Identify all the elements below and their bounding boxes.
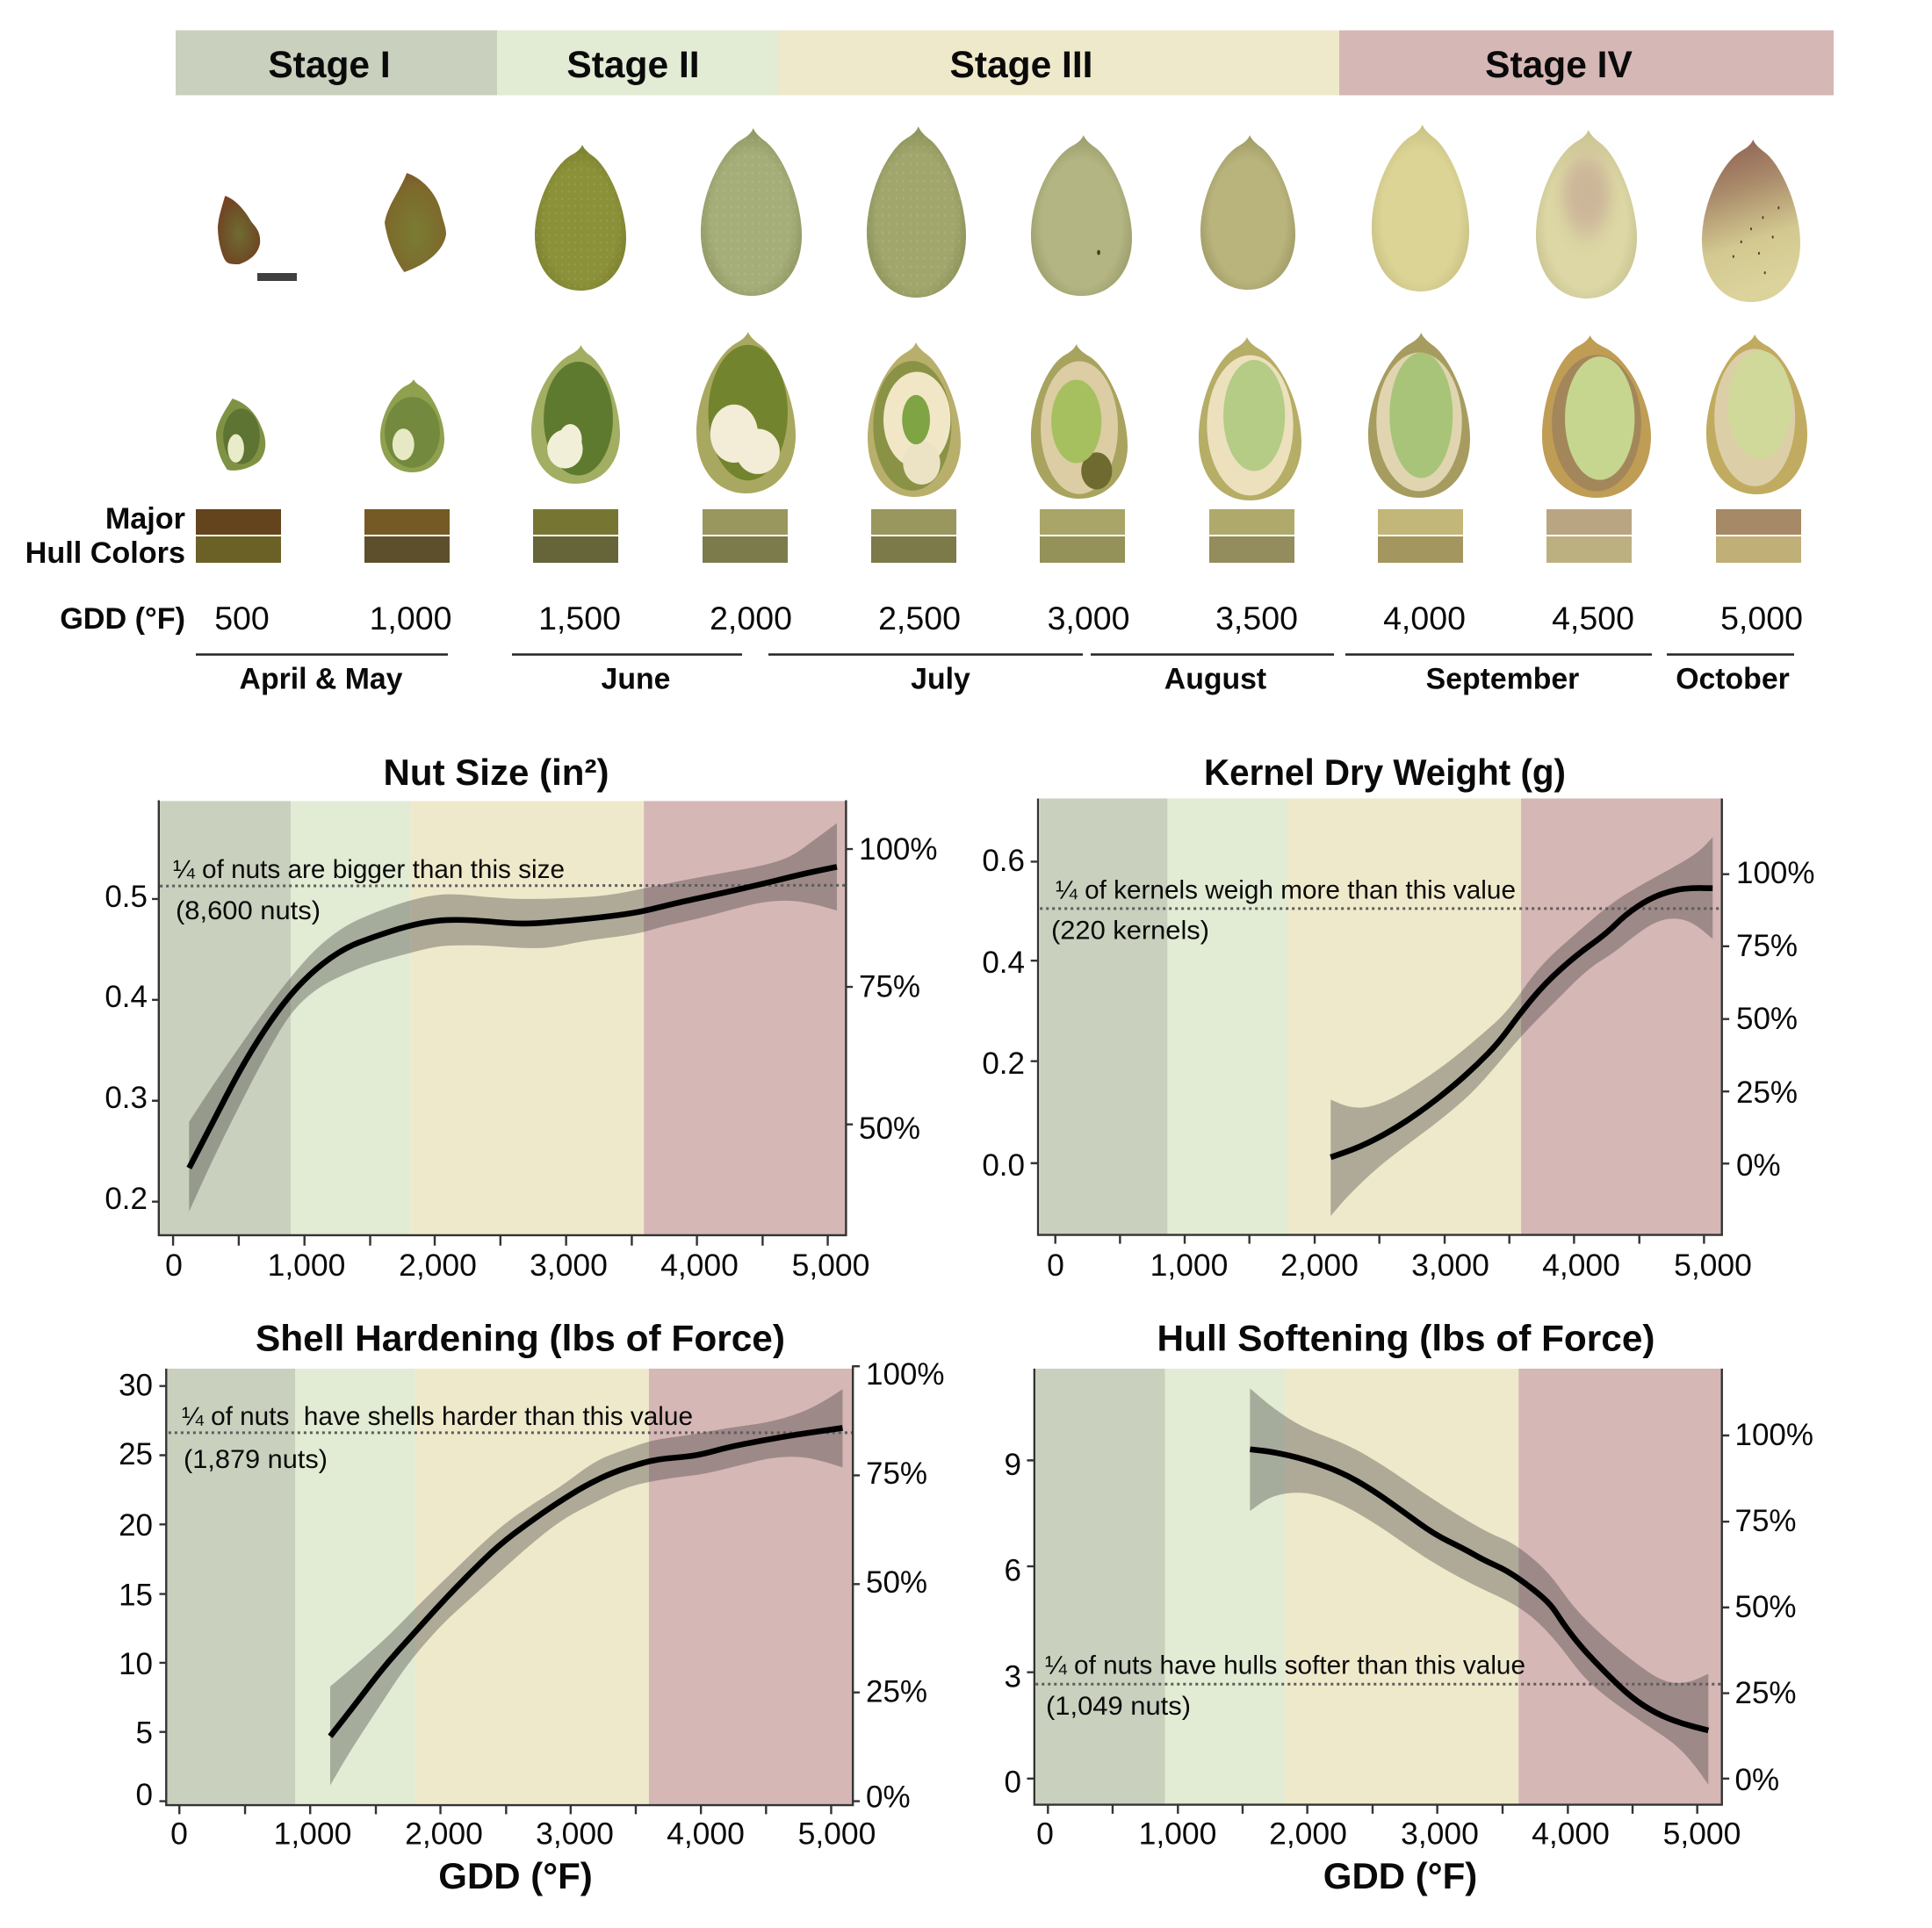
bottom axis labels: 4,000 (667, 1816, 745, 1851)
right axis percent labels: 50% (859, 1111, 920, 1146)
annotation: (1,879 nuts) (184, 1445, 328, 1474)
bottom axis labels: 2,000 (399, 1248, 477, 1283)
GDD scale row: GDD (°F) (60, 602, 185, 636)
right axis percent labels: 100% (1735, 1418, 1813, 1452)
x axis title: GDD (°F) (1323, 1855, 1477, 1896)
bottom axis labels: 1,000 (268, 1248, 345, 1283)
chart: nut size (105, 752, 938, 1283)
bottom axis labels: 4,000 (1532, 1816, 1610, 1851)
left axis labels: 9 (1005, 1448, 1021, 1482)
GDD scale row: 3,000 (1048, 600, 1129, 637)
right axis percent labels: 75% (1736, 929, 1798, 963)
annotation (173, 855, 565, 925)
left axis labels: 0.0 (982, 1148, 1025, 1183)
bottom axis labels: 5,000 (1674, 1248, 1752, 1283)
left axis labels (982, 844, 1025, 1183)
left axis labels: 30 (119, 1368, 153, 1403)
chart: shell hardening (119, 1317, 945, 1896)
bottom axis labels (1047, 1248, 1752, 1283)
GDD scale row (60, 600, 1803, 637)
left axis labels: 0.4 (105, 980, 148, 1014)
nut 2000 GDD (701, 128, 802, 296)
left axis labels: 0.2 (105, 1182, 148, 1216)
annotation (1045, 1651, 1525, 1721)
row label: major hull colors: Major (105, 502, 185, 536)
right axis percent labels (866, 1357, 945, 1814)
GDD scale row: 500 (214, 600, 270, 637)
chart: hull softening (1005, 1317, 1813, 1896)
bottom axis labels: 2,000 (405, 1816, 483, 1851)
nut 500 GDD (218, 196, 260, 264)
split nut 2000 GDD (696, 332, 796, 493)
left axis labels: 15 (119, 1579, 153, 1612)
right axis percent labels: 50% (866, 1565, 927, 1600)
stage banner: Stage II (566, 45, 700, 86)
right axis percent labels: 25% (1735, 1676, 1797, 1710)
right axis percent labels: 100% (866, 1357, 945, 1392)
left axis labels: 0 (1005, 1765, 1021, 1800)
right axis percent labels: 100% (859, 832, 938, 867)
left axis labels: 10 (119, 1647, 153, 1681)
GDD scale row: 2,500 (878, 600, 961, 637)
bottom axis labels: 3,000 (1401, 1816, 1479, 1851)
bottom axis labels: 0 (165, 1248, 183, 1283)
bottom axis labels: 1,000 (1139, 1816, 1216, 1851)
left axis labels: 20 (119, 1508, 153, 1543)
right axis percent labels (859, 832, 938, 1146)
right axis percent labels: 75% (866, 1457, 927, 1491)
left axis labels: 0.6 (982, 844, 1025, 878)
left axis labels: 6 (1005, 1554, 1021, 1587)
right axis percent labels: 0% (866, 1781, 911, 1814)
right axis percent labels: 0% (1735, 1763, 1779, 1797)
annotation: (1,049 nuts) (1046, 1692, 1191, 1721)
left axis labels (105, 880, 148, 1216)
nut 1000 GDD (385, 173, 446, 272)
bottom axis labels: 2,000 (1269, 1816, 1347, 1851)
nut 1500 GDD (535, 145, 626, 291)
nut 5000 GDD (1702, 140, 1800, 302)
bottom axis labels (170, 1816, 876, 1851)
stage banner: Stage I (268, 45, 391, 86)
chart: kernel dry weight (982, 752, 1815, 1283)
GDD scale row: 1,000 (370, 600, 451, 637)
months row: September (1426, 662, 1579, 695)
left axis labels: 0.3 (105, 1081, 148, 1115)
annotation: ¼ of nuts have shells harder than this value (182, 1402, 693, 1431)
left axis labels: 25 (119, 1437, 153, 1471)
bottom axis labels: 3,000 (1411, 1248, 1489, 1283)
scale bar (257, 273, 297, 281)
bottom axis labels: 3,000 (536, 1816, 614, 1851)
annotation: (8,600 nuts) (176, 896, 321, 925)
split nut 1500 GDD (531, 345, 620, 484)
bottom axis labels: 0 (1047, 1248, 1064, 1283)
right axis percent labels: 75% (1735, 1504, 1797, 1538)
chart title: Kernel Dry Weight (g) (1204, 752, 1566, 793)
left axis labels: 0.4 (982, 946, 1025, 980)
bottom axis labels: 5,000 (792, 1248, 869, 1283)
hull colour swatches (196, 509, 1801, 563)
stage banner: Stage III (950, 45, 1092, 86)
GDD scale row: 5,000 (1720, 600, 1803, 637)
left axis labels: 0 (136, 1778, 153, 1812)
left axis labels: 5 (136, 1716, 153, 1751)
bottom axis labels: 5,000 (1663, 1816, 1741, 1851)
bottom axis labels: 5,000 (798, 1816, 876, 1851)
split nut 5000 GDD (1706, 335, 1807, 494)
row label: major hull colors: Hull Colors (25, 536, 185, 570)
bottom axis labels: 1,000 (1150, 1248, 1228, 1283)
nut 4000 GDD (1372, 125, 1469, 291)
nut 2500 GDD (867, 126, 966, 298)
GDD scale row: 4,000 (1383, 600, 1466, 637)
bottom axis labels: 1,000 (274, 1816, 351, 1851)
months row: June (602, 662, 670, 695)
nut 3000 GDD (1031, 135, 1132, 296)
right axis percent labels: 75% (859, 969, 920, 1004)
chart title: Shell Hardening (lbs of Force) (256, 1317, 785, 1359)
stage banner (176, 30, 1834, 95)
row label: major hull colors (25, 502, 185, 570)
bottom axis labels: 2,000 (1280, 1248, 1359, 1283)
months row: August (1164, 662, 1266, 695)
split nut 3500 GDD (1199, 337, 1301, 500)
annotation (1051, 876, 1516, 945)
GDD scale row: 4,500 (1552, 600, 1634, 637)
split nut 4500 GDD (1542, 335, 1651, 498)
left axis labels (119, 1368, 153, 1812)
annotation: (220 kernels) (1051, 917, 1209, 945)
x axis title: GDD (°F) (438, 1855, 593, 1896)
nut 3500 GDD (1200, 135, 1295, 290)
bottom axis labels: 3,000 (530, 1248, 608, 1283)
GDD scale row: 1,500 (538, 600, 621, 637)
annotation: ¼ of nuts have hulls softer than this value (1045, 1651, 1525, 1680)
nut 4500 GDD (1536, 130, 1637, 299)
split nut 3000 GDD (1031, 344, 1128, 499)
right axis percent labels: 0% (1736, 1148, 1781, 1183)
right axis percent labels: 50% (1736, 1002, 1798, 1036)
split nut 500 GDD (216, 399, 265, 471)
left axis labels: 0.5 (105, 880, 148, 914)
left axis labels: 0.2 (982, 1047, 1025, 1081)
whole nut photographs row (218, 125, 1800, 302)
left axis labels (1005, 1448, 1021, 1800)
right axis percent labels: 25% (1736, 1076, 1798, 1110)
right axis percent labels: 50% (1735, 1590, 1797, 1624)
annotation: ¼ of kernels weigh more than this value (1056, 876, 1516, 904)
months row: April & May (240, 662, 403, 695)
months row: July (911, 662, 970, 695)
GDD scale row: 3,500 (1215, 600, 1298, 637)
right axis percent labels: 100% (1736, 856, 1815, 890)
annotation: ¼ of nuts are bigger than this size (173, 855, 565, 884)
bottom axis labels: 4,000 (660, 1248, 739, 1283)
months row: October (1676, 662, 1790, 695)
split nut 2500 GDD (868, 342, 961, 497)
bottom axis labels (1036, 1816, 1741, 1851)
stage banner: Stage IV (1485, 45, 1633, 86)
split nut photographs row (216, 332, 1807, 500)
right axis percent labels (1735, 1418, 1813, 1797)
left axis labels: 3 (1005, 1659, 1021, 1694)
bottom axis labels: 4,000 (1542, 1248, 1620, 1283)
annotation (182, 1402, 693, 1474)
split nut 4000 GDD (1368, 333, 1470, 498)
bottom axis labels (165, 1248, 869, 1283)
right axis percent labels: 25% (866, 1675, 927, 1709)
chart title: Hull Softening (lbs of Force) (1157, 1317, 1654, 1359)
right axis percent labels (1736, 856, 1815, 1183)
chart title: Nut Size (in²) (383, 752, 609, 793)
GDD scale row: 2,000 (710, 600, 792, 637)
bottom axis labels: 0 (170, 1816, 188, 1851)
months row (196, 655, 1794, 695)
split nut 1000 GDD (380, 379, 444, 472)
bottom axis labels: 0 (1036, 1816, 1054, 1851)
